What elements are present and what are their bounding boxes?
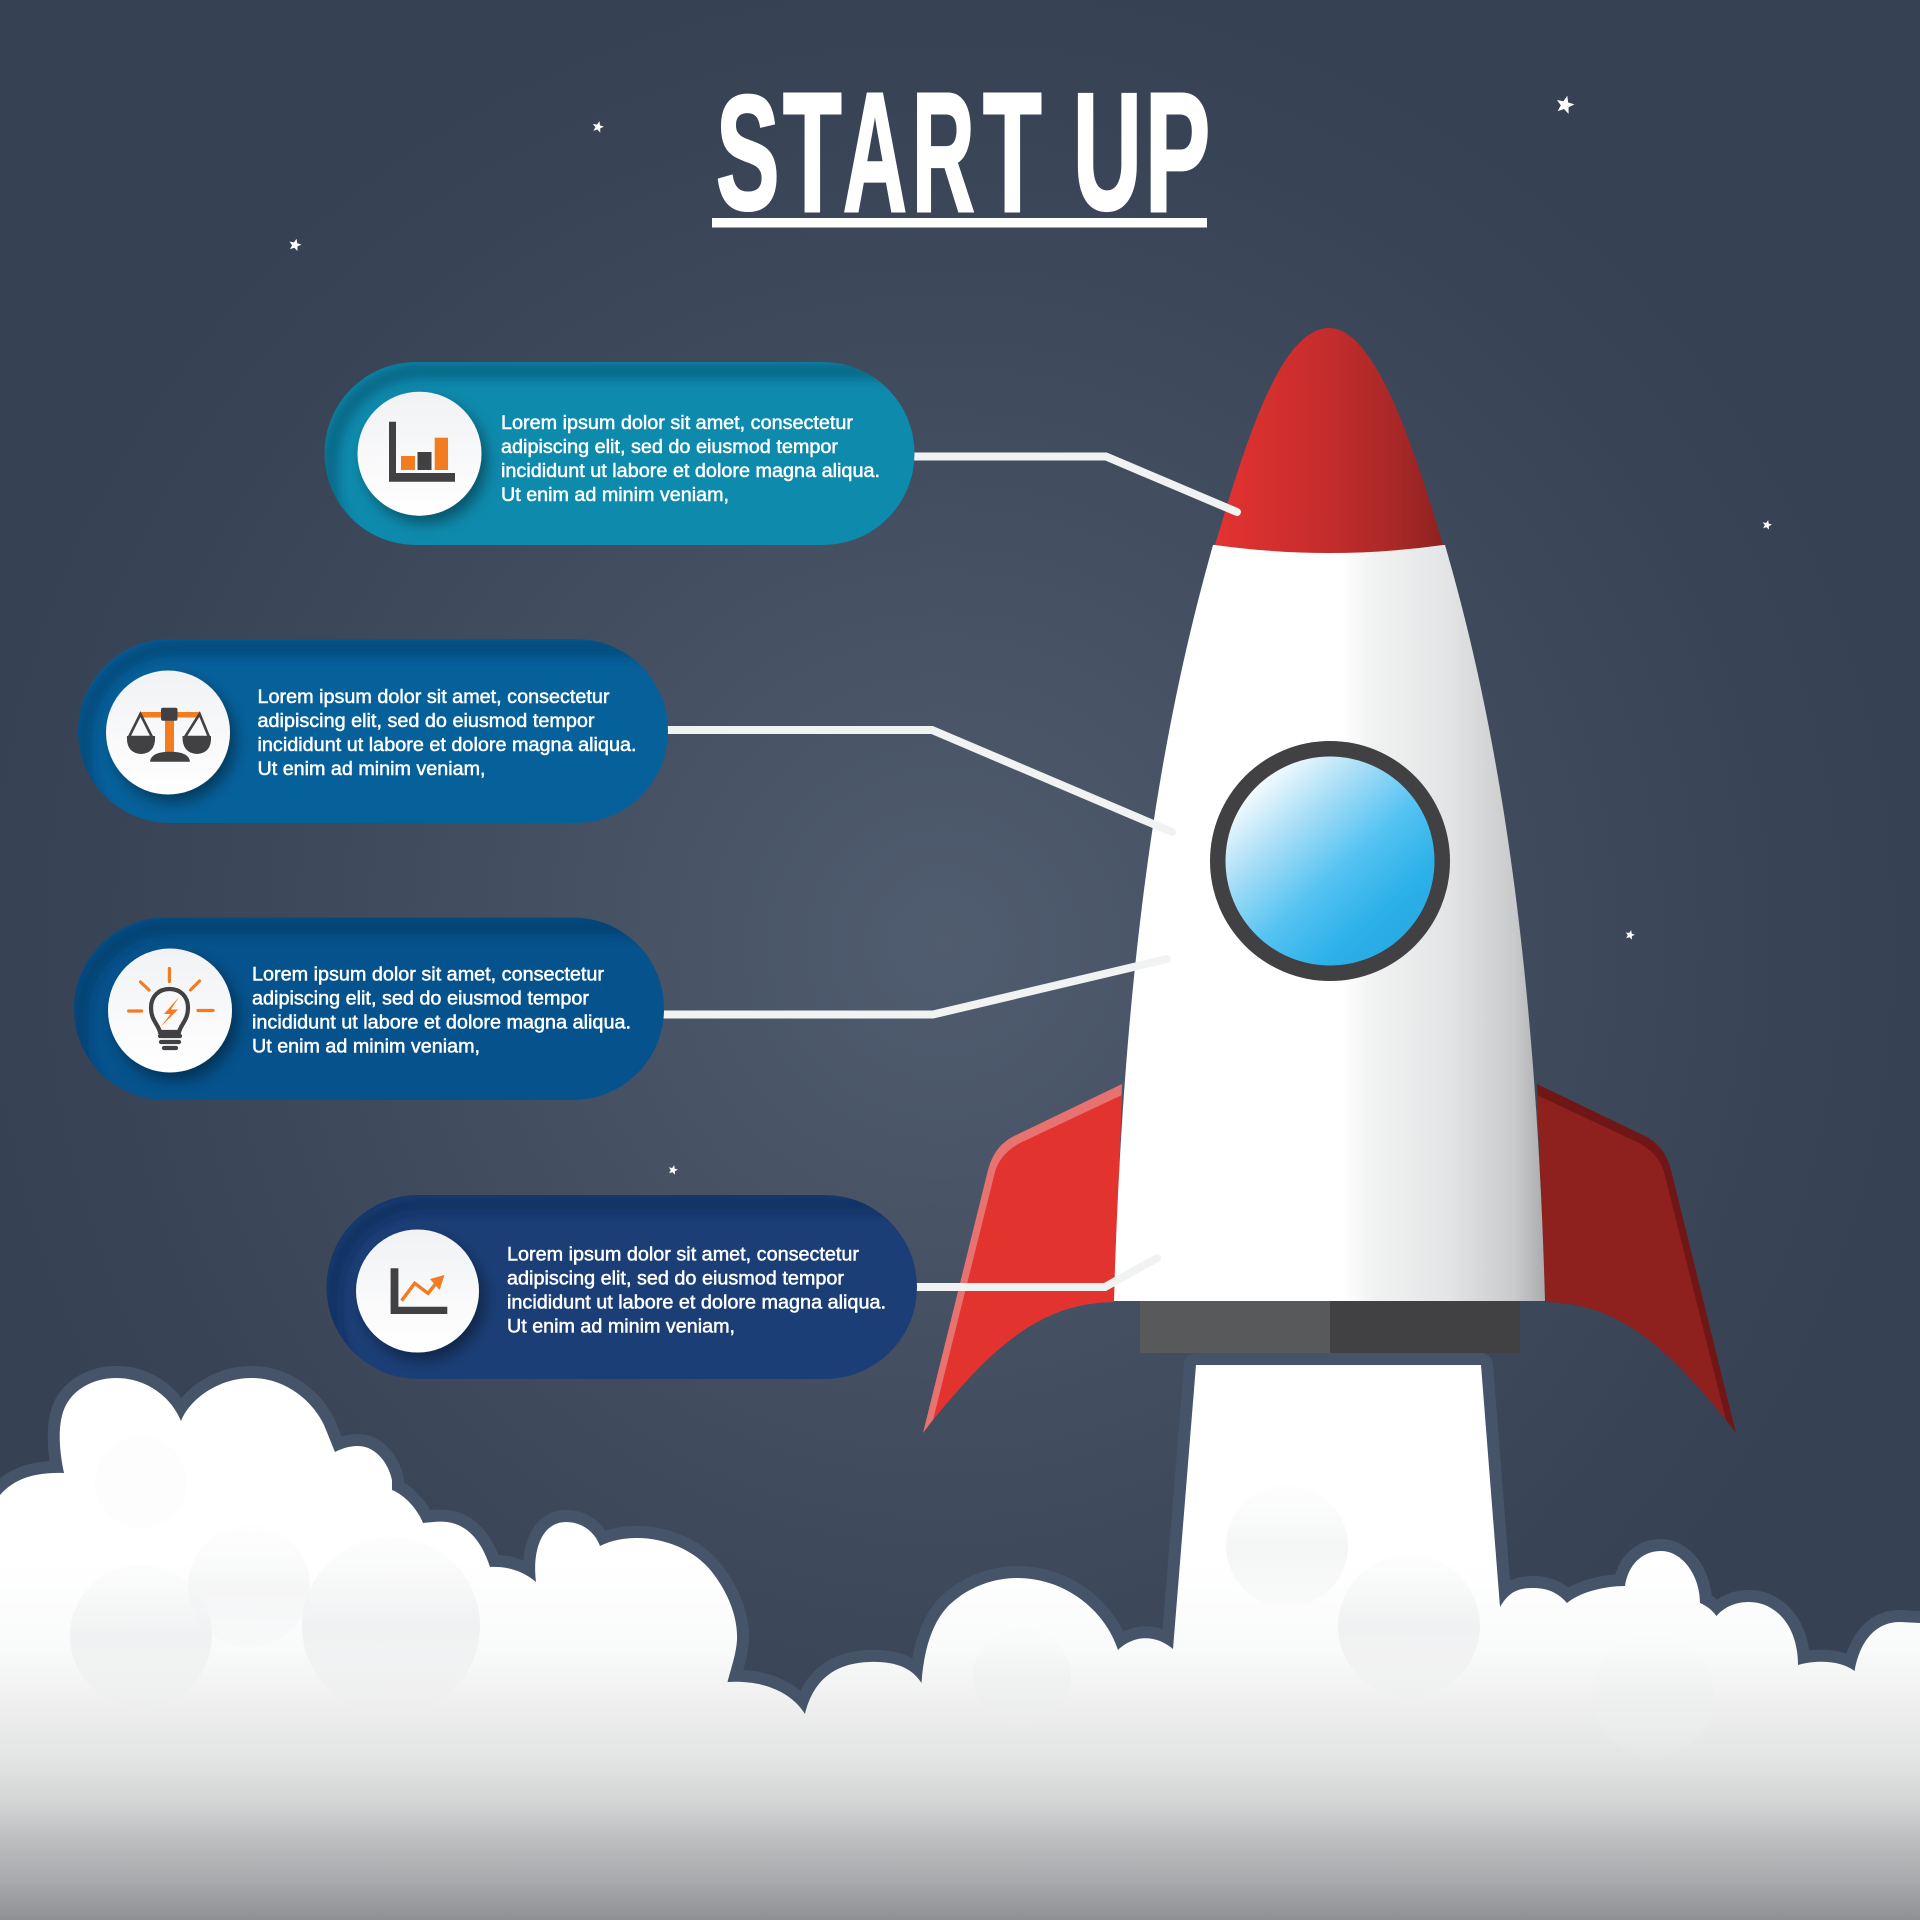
icon: growth chart	[356, 1230, 479, 1352]
text block: adipiscing elit, sed do eiusmod tempor	[501, 436, 838, 458]
text block: Lorem ipsum dolor sit amet, consectetur	[507, 1244, 859, 1266]
text block: adipiscing elit, sed do eiusmod tempor	[507, 1268, 844, 1290]
text block: Ut enim ad minim veniam,	[501, 484, 729, 506]
icon: balance scale	[106, 670, 230, 794]
panel: item 1	[324, 362, 914, 545]
title: S	[716, 62, 779, 244]
left fin	[923, 1084, 1122, 1433]
icon: bar chart	[358, 392, 482, 516]
text block	[501, 412, 880, 506]
window	[1210, 741, 1450, 981]
text block: incididunt ut labore et dolore magna aliqua.	[252, 1012, 631, 1034]
text block: Ut enim ad minim veniam,	[252, 1036, 480, 1058]
title: P	[1145, 58, 1210, 248]
stars	[288, 94, 1773, 1175]
text block	[507, 1244, 886, 1338]
text block: Lorem ipsum dolor sit amet, consectetur	[252, 964, 604, 986]
nose cone	[1215, 328, 1443, 553]
text block: incididunt ut labore et dolore magna aliqua.	[501, 460, 880, 482]
text block: incididunt ut labore et dolore magna aliqua.	[258, 734, 636, 756]
rocket	[923, 328, 1736, 1433]
text block	[258, 686, 636, 780]
title: T	[783, 58, 842, 248]
title: R	[912, 57, 975, 248]
title: A	[843, 57, 907, 247]
text block: adipiscing elit, sed do eiusmod tempor	[252, 988, 589, 1010]
panel: item 2	[78, 639, 668, 823]
text block: Lorem ipsum dolor sit amet, consectetur	[501, 412, 853, 434]
text block: Ut enim ad minim veniam,	[507, 1316, 735, 1338]
title: U	[1073, 58, 1142, 245]
title: T	[983, 58, 1042, 248]
text block: Lorem ipsum dolor sit amet, consectetur	[258, 686, 610, 708]
engine base	[1140, 1301, 1520, 1353]
panel: item 4	[326, 1195, 917, 1379]
text block	[252, 964, 631, 1058]
right fin	[1537, 1084, 1736, 1433]
rocket body	[1114, 545, 1545, 1301]
text block: adipiscing elit, sed do eiusmod tempor	[258, 710, 595, 732]
connector lines	[662, 456, 1237, 1287]
text block: Ut enim ad minim veniam,	[258, 758, 486, 780]
panel: item 3	[74, 918, 664, 1100]
icon: light bulb	[108, 948, 232, 1072]
text block: incididunt ut labore et dolore magna aliqua.	[507, 1292, 886, 1314]
title	[712, 57, 1210, 248]
clouds and exhaust flame	[0, 1365, 1920, 1920]
